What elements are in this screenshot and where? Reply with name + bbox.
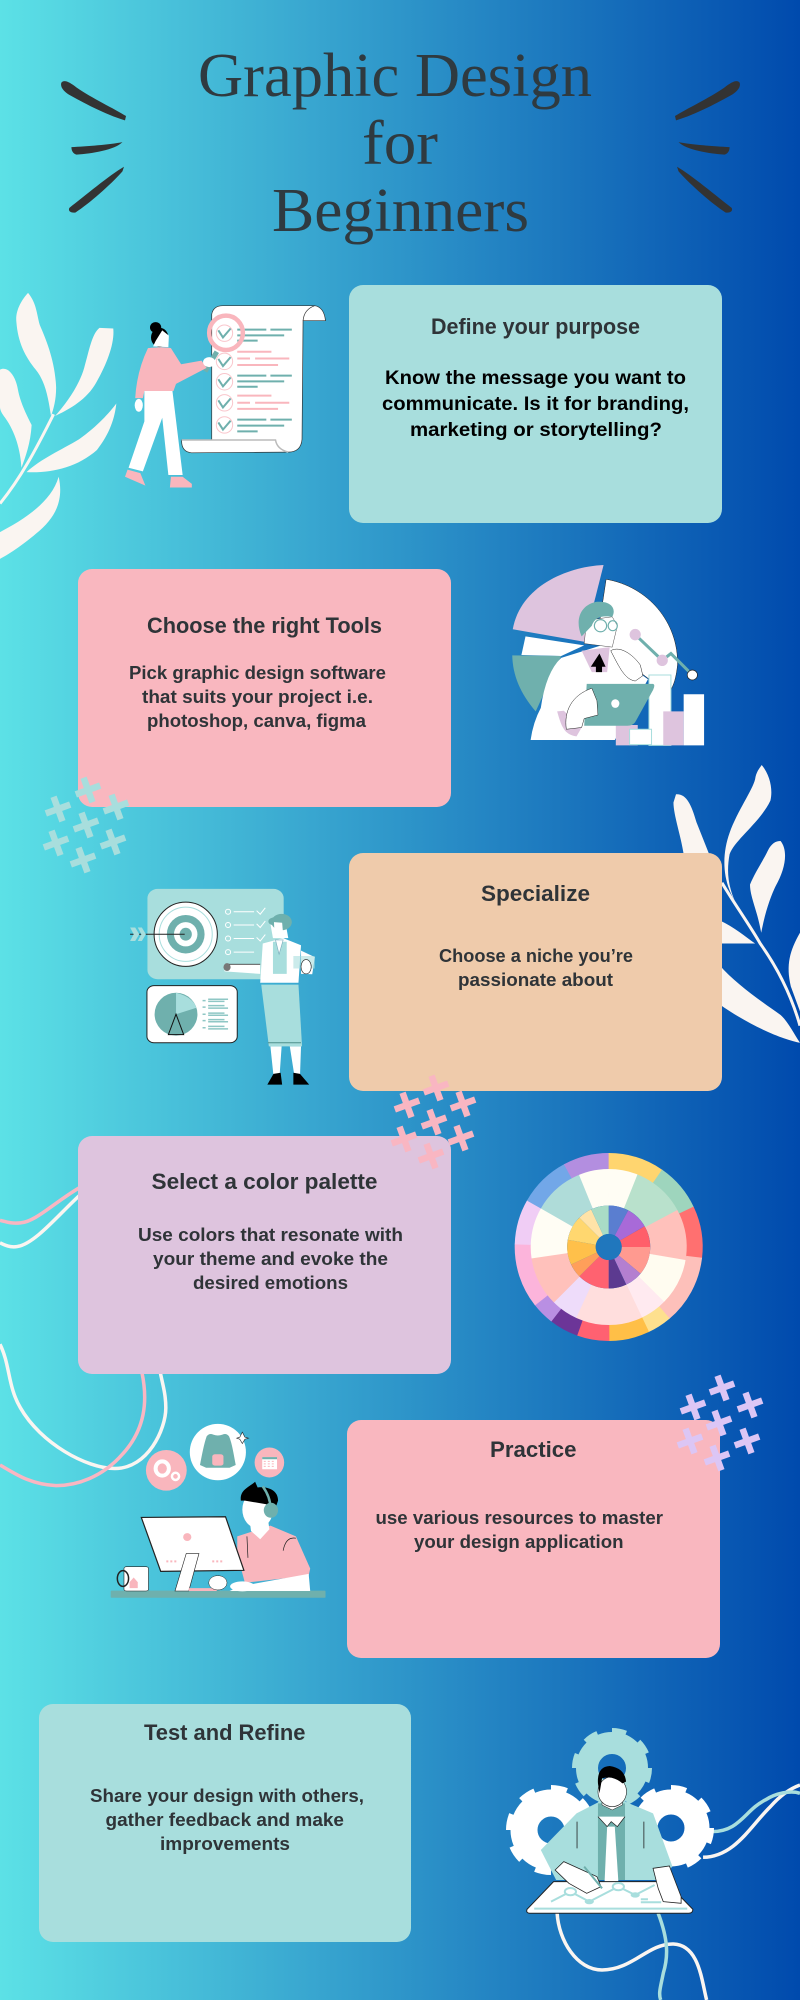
illustration: man at computer with idea bubbles [111,1424,326,1598]
text: select a color palette body: Use colors that resonate with [138,1224,403,1245]
text: select a color palette body: desired emotions [193,1272,348,1293]
heading: select a color palette: Select a color palette [152,1169,378,1194]
text: choose the right tools body: that suits your project i.e. [142,686,373,707]
outer ring [488,1126,730,1368]
middle ring [524,1162,694,1332]
title: Graphic Design [198,42,592,110]
illustration: woman presenting target and pie chart [130,889,315,1085]
text: select a color palette body: your theme and evoke the [153,1248,388,1269]
heading: practice: Practice [490,1437,576,1462]
panel: choose the right tools [78,569,451,807]
icon: top-left leaf branch [0,293,116,559]
icon: pink plus signs [387,1071,480,1173]
text: test and refine body: gather feedback and make [106,1809,344,1830]
panel: define your purpose [349,285,722,523]
illustration: man drawing at a table [527,1766,693,1913]
heading: define your purpose: Define your purpose [431,314,640,339]
chart: colour wheel [488,1126,730,1368]
text: practice body: your design application [414,1531,624,1552]
panel: practice [347,1420,720,1658]
title: Beginners [272,177,529,245]
text: define your purpose body: communicate. Is it for branding, [382,393,689,415]
panel: select a color palette [78,1136,451,1374]
text: select a color palette body [138,1224,403,1293]
icon: right leaf branch [673,765,800,1043]
text: define your purpose body: Know the message you want to [385,367,686,389]
icon: left swirling lines [0,1186,166,1486]
wheel hub [596,1234,622,1260]
title: for [362,110,438,178]
text: test and refine body [90,1785,364,1854]
icon: right title accent strokes [675,81,740,213]
text: define your purpose body: marketing or storytelling? [410,419,662,441]
illustration: woman inspecting a checklist scroll [125,306,326,487]
text: test and refine body: improvements [160,1833,290,1854]
icon: purple plus signs [673,1371,767,1475]
text: specialize body: Choose a niche you’re [439,945,633,966]
heading: choose the right tools: Choose the right Tools [147,613,382,638]
panel: test and refine [39,1704,411,1942]
text: specialize body [439,945,633,990]
text: choose the right tools body: Pick graphic design software [129,662,386,683]
heading: test and refine: Test and Refine [144,1720,306,1745]
icon: bottom-right swirling lines [557,1785,800,2000]
illustration: gears behind the man [510,1732,710,1871]
text: specialize body: passionate about [458,969,613,990]
text: test and refine body: Share your design with others, [90,1785,364,1806]
text: choose the right tools body [129,662,386,731]
inner ring [570,1208,647,1286]
text: choose the right tools body: photoshop, canva, figma [147,710,367,731]
text: define your purpose body [382,367,689,441]
title [198,42,592,245]
text: practice body [376,1507,663,1552]
icon: left title accent strokes [61,81,126,213]
illustration: man with pie chart and tablet [512,565,704,745]
icon: teal plus signs [39,773,133,877]
panel: specialize [349,853,722,1091]
heading: specialize: Specialize [481,881,590,906]
text: practice body: use various resources to master [376,1507,663,1528]
